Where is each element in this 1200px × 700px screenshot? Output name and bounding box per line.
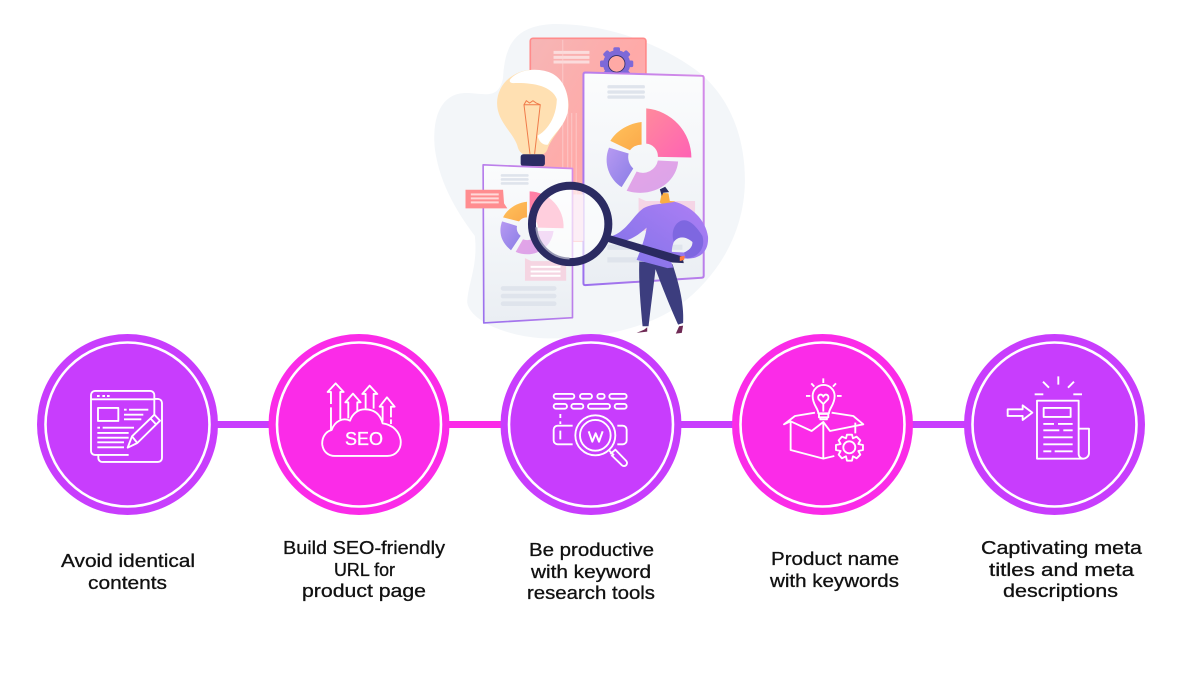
step 2 label: Build SEO-friendly bbox=[283, 538, 445, 558]
salmon speech tag bbox=[466, 190, 507, 208]
step 5 label: Captivating meta bbox=[981, 538, 1143, 558]
icon: box with bulb and gear bbox=[784, 378, 863, 461]
connector lines bbox=[215, 421, 967, 428]
shirt bbox=[610, 202, 708, 268]
step 3 circle bbox=[500, 334, 682, 515]
step 5 circle bbox=[964, 334, 1145, 515]
icon: cloud with SEO and arrows: SEO bbox=[345, 429, 383, 449]
step 4 label: Product name bbox=[771, 549, 899, 569]
step 4 label bbox=[769, 549, 899, 591]
icon: document with arrow bbox=[1008, 376, 1089, 459]
icon: keyword magnifier bbox=[554, 394, 627, 466]
legs bbox=[639, 262, 683, 326]
step 1 label: Avoid identical bbox=[61, 551, 195, 571]
back salmon panel bbox=[530, 38, 646, 241]
icon: cloud with SEO and arrows bbox=[322, 383, 401, 456]
light bulb bbox=[497, 70, 568, 166]
step 2 label bbox=[283, 538, 445, 601]
gear icon bbox=[600, 47, 633, 80]
step 3 label: with keyword bbox=[530, 562, 651, 582]
step 3 label: Be productive bbox=[529, 540, 654, 560]
step 4 circle bbox=[732, 334, 913, 515]
step 2 circle bbox=[268, 334, 450, 515]
step 3 label: research tools bbox=[527, 583, 655, 603]
donut chart small bbox=[500, 191, 564, 254]
step 1: avoid identical contents bbox=[37, 334, 218, 593]
donut chart large bbox=[607, 108, 691, 193]
magnifying glass bbox=[532, 186, 685, 263]
step 3: keyword research tools bbox=[500, 334, 682, 603]
icon: web page with pencil bbox=[91, 391, 162, 462]
illustration: SEO analyst with magnifying glass bbox=[434, 24, 745, 338]
left document panel bbox=[483, 165, 583, 323]
step 3 label bbox=[527, 540, 655, 603]
right document panel bbox=[583, 72, 704, 285]
person bbox=[610, 187, 708, 334]
step 5 label: descriptions bbox=[1003, 581, 1118, 601]
step 1 label bbox=[61, 551, 195, 593]
head and neck bbox=[660, 193, 675, 205]
background blob bbox=[434, 24, 745, 338]
step 1 circle bbox=[37, 334, 218, 515]
step 2: SEO-friendly URL bbox=[268, 334, 450, 601]
step 4 label: with keywords bbox=[769, 571, 899, 591]
step 2 label: URL for bbox=[334, 560, 395, 580]
step 5 label bbox=[981, 538, 1143, 601]
step 5 label: titles and meta bbox=[989, 560, 1135, 580]
step 5: meta titles and descriptions bbox=[964, 334, 1145, 601]
step 4: product name with keywords bbox=[732, 334, 913, 591]
step 1 label: contents bbox=[88, 573, 167, 593]
step 2 label: product page bbox=[302, 581, 426, 601]
